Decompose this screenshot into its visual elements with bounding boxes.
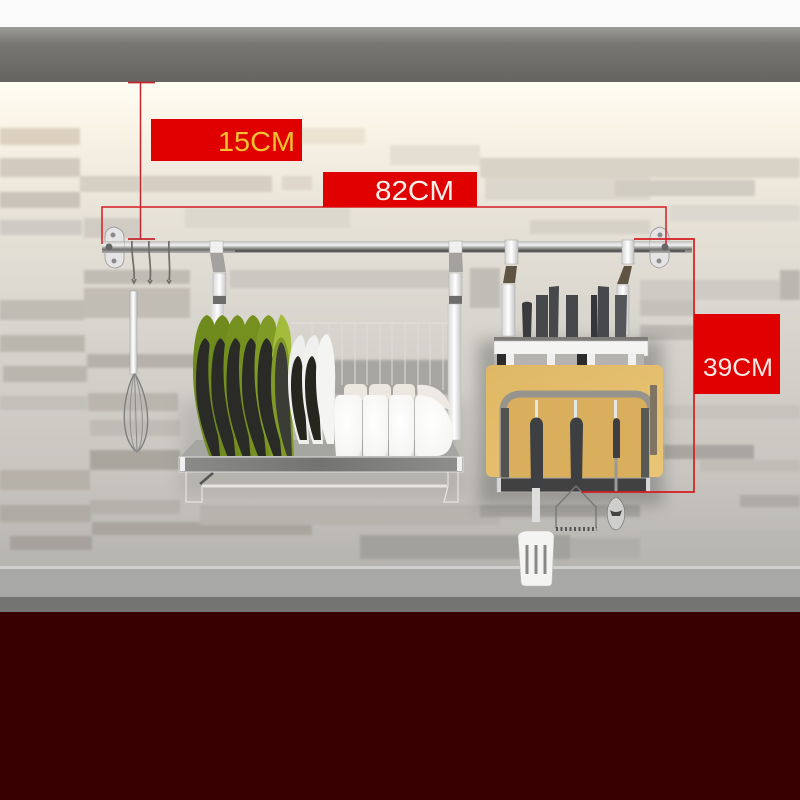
board base tray [497, 478, 650, 492]
hanging spoon [607, 400, 625, 530]
82CM label: 82CM [375, 175, 454, 206]
small S hooks [132, 241, 171, 283]
dish tray front [179, 457, 463, 472]
wall cabinet underside band [0, 27, 800, 82]
15CM label [151, 119, 302, 161]
white plates [288, 334, 335, 444]
dish rack hanging brackets [210, 241, 463, 440]
bowls [334, 384, 453, 456]
green plates [193, 314, 294, 456]
knife block brackets [502, 240, 634, 336]
wire back of dish rack [290, 323, 448, 390]
82CM label [323, 172, 477, 207]
wall rail [102, 227, 692, 268]
dish tray top surface [180, 440, 460, 457]
39CM label [694, 314, 780, 394]
right wall mount [650, 227, 670, 268]
knife holder [494, 337, 648, 367]
15CM measure line [128, 82, 155, 239]
hanging masher [556, 400, 597, 529]
left wall mount [104, 227, 124, 268]
knives [522, 286, 627, 338]
dark red lower area [0, 612, 800, 800]
82CM measure line [102, 207, 666, 244]
countertop [0, 566, 800, 612]
tiled wall background [0, 82, 800, 567]
cutting board [486, 365, 663, 478]
towel bar under tray [186, 472, 458, 502]
whisk [124, 291, 148, 452]
hanging spatula [518, 400, 554, 586]
39CM measure line [581, 239, 694, 492]
15CM label: 15CM [218, 126, 295, 157]
39CM label: 39CM [703, 354, 773, 382]
ceiling strip [0, 0, 800, 28]
